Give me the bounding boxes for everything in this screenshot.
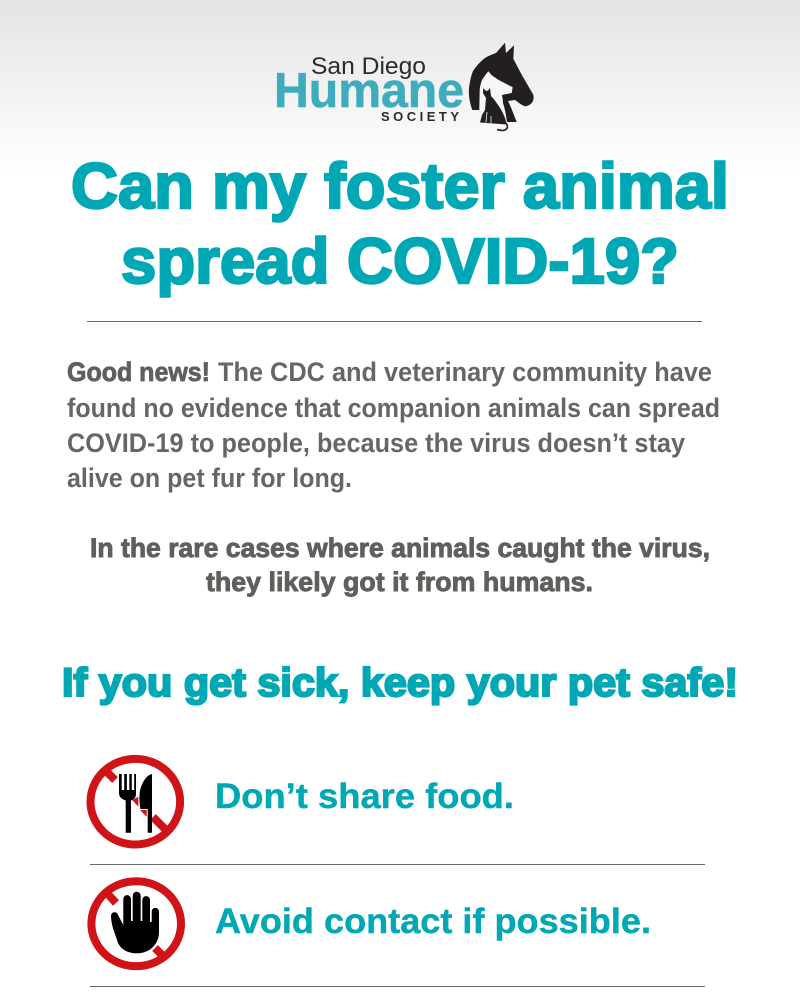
title: spread COVID-19? — [121, 225, 679, 297]
icon: no sharing food — [90, 759, 180, 844]
logo wordmark: San Diego — [311, 53, 426, 80]
intro paragraph — [67, 357, 720, 493]
emphasis statement: In the rare cases where animals caught the virus, — [90, 533, 710, 563]
emphasis statement: they likely got it from humans. — [206, 567, 593, 597]
intro paragraph: Good news! — [67, 357, 210, 387]
emphasis statement — [90, 533, 710, 597]
title: Can my foster animal — [71, 150, 729, 222]
intro paragraph: alive on pet fur for long. — [67, 463, 352, 493]
icon: horse, dog and cat silhouette — [469, 43, 534, 130]
label: don't share food: Don’t share food. — [215, 777, 514, 816]
logo: San Diego Humane Society — [274, 43, 534, 130]
icon: avoid contact — [91, 881, 181, 966]
intro paragraph: The CDC and veterinary community have — [218, 357, 712, 387]
subheading: If you get sick, keep your pet safe! — [62, 661, 738, 705]
intro paragraph: COVID-19 to people, because the virus doesn’t stay — [67, 428, 685, 458]
logo wordmark: SOCIETY — [381, 109, 459, 124]
title — [71, 150, 729, 297]
label: avoid contact if possible: Avoid contact if possible. — [215, 902, 651, 941]
intro paragraph: found no evidence that companion animals can spread — [67, 393, 720, 423]
logo wordmark: Humane — [274, 64, 464, 118]
